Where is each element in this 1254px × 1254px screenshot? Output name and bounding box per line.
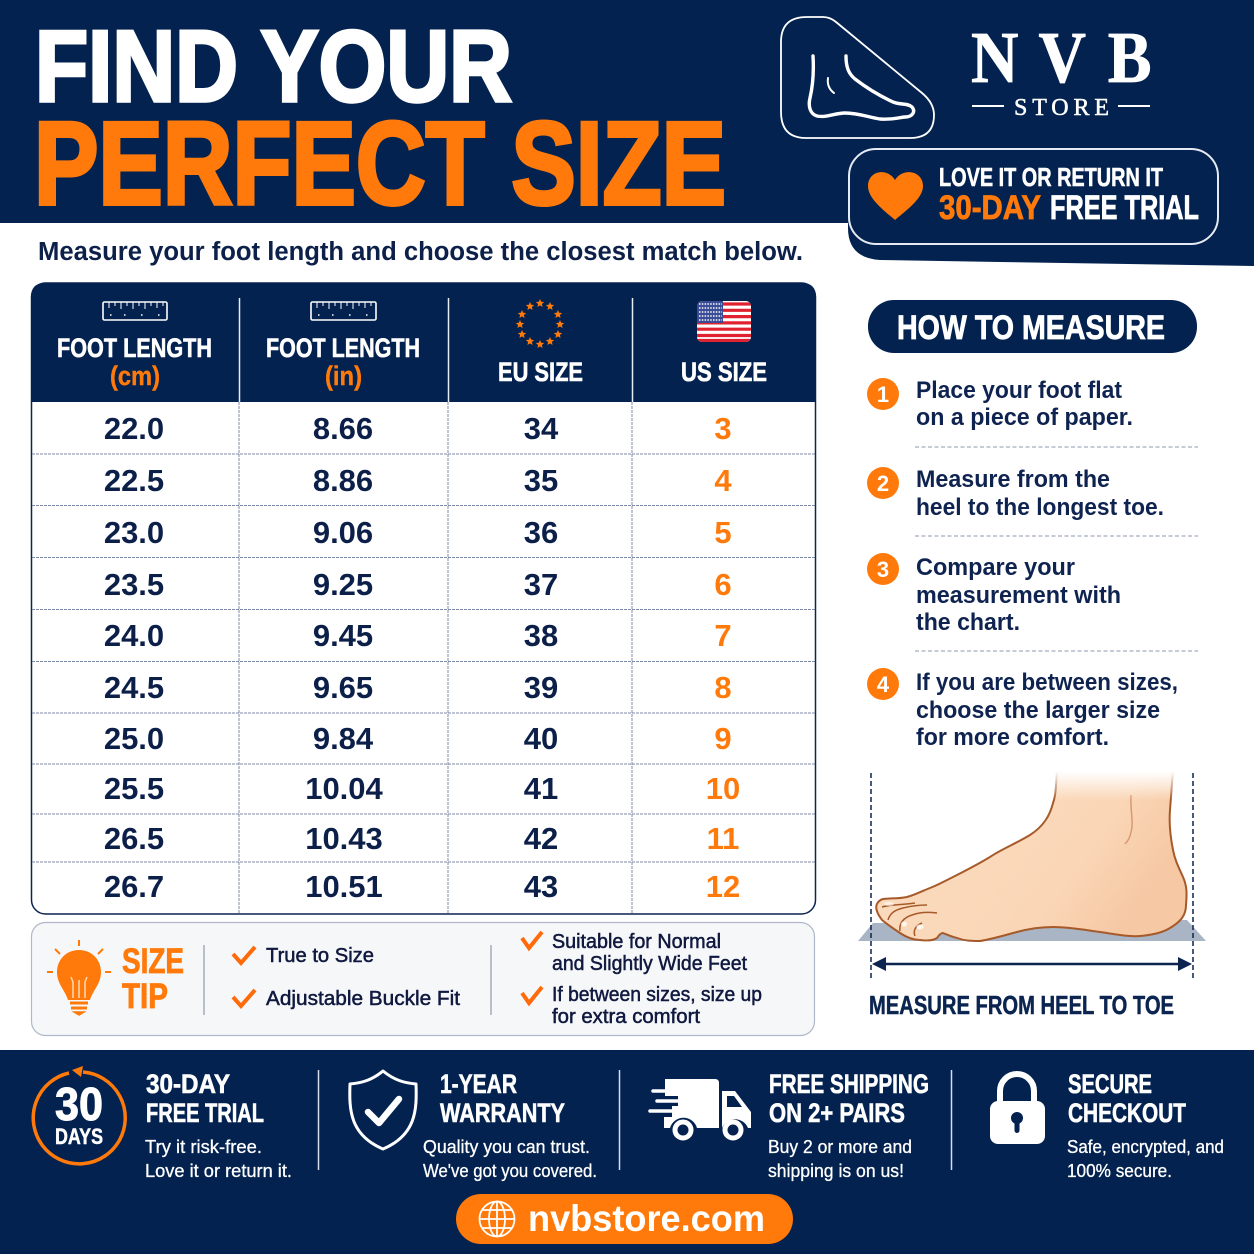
- table rows: 8.86: [313, 463, 373, 498]
- column headings: FOOT LENGTH: [57, 333, 212, 363]
- step 3: Compare your: [916, 554, 1075, 581]
- feature: free shipping: Buy 2 or more and: [768, 1136, 912, 1157]
- panel: how to measure: [867, 300, 1198, 751]
- header background: [0, 0, 1254, 266]
- brand logo: NVB: [971, 18, 1152, 99]
- feature: 30-day free trial: Try it risk-free.: [145, 1136, 262, 1157]
- table rows: 40: [524, 721, 558, 756]
- table rows: 25.0: [104, 721, 164, 756]
- feature: 1-year warranty: Quality you can trust.: [423, 1136, 590, 1157]
- icon: foot logo: [781, 17, 934, 138]
- table rows: 10.51: [305, 869, 383, 904]
- panel: size tip: SIZE: [122, 942, 184, 981]
- table rows: 9.84: [313, 721, 374, 756]
- website button: [456, 1194, 793, 1244]
- table rows: 10: [706, 771, 740, 806]
- icon: light bulb: [47, 940, 111, 1015]
- feature: free shipping: FREE SHIPPING: [769, 1069, 929, 1099]
- icon: US flag: [697, 301, 751, 342]
- table rows: 41: [524, 771, 558, 806]
- feature: 1-year warranty: [350, 1069, 597, 1181]
- step 1: 1: [877, 382, 889, 407]
- table rows: 26.7: [104, 869, 164, 904]
- badge: 30-day free trial: [849, 149, 1218, 244]
- icon: check marks: [233, 932, 542, 1006]
- step 1: [867, 377, 1133, 431]
- badge: 30-day free trial: 30-DAY: [939, 189, 1041, 227]
- step 2: 2: [877, 471, 889, 496]
- table rows: 34: [524, 411, 559, 446]
- table rows: 22.0: [104, 411, 164, 446]
- column headings: [57, 333, 767, 391]
- title: PERFECT SIZE: [34, 98, 726, 230]
- table rows: 11: [707, 821, 739, 856]
- panel: size tip: and Slightly Wide Feet: [552, 953, 747, 975]
- website button: nvbstore.com: [528, 1198, 765, 1239]
- step 3: the chart.: [916, 609, 1020, 636]
- step 2: Measure from the: [916, 466, 1110, 493]
- table rows: 22.5: [104, 463, 164, 498]
- title: FIND YOUR: [35, 11, 512, 123]
- table rows: 8.66: [313, 411, 373, 446]
- feature: 30-day free trial: FREE TRIAL: [146, 1098, 264, 1128]
- column headings: US SIZE: [681, 357, 767, 387]
- foot illustration: [858, 764, 1206, 1020]
- feature: free shipping: shipping is on us!: [768, 1160, 904, 1181]
- feature: free shipping: ON 2+ PAIRS: [769, 1098, 905, 1128]
- arrow: heel to toe: [872, 957, 1192, 971]
- column headings: (in): [325, 361, 362, 391]
- feature: secure checkout: 100% secure.: [1067, 1160, 1172, 1181]
- icon: EU stars: [516, 299, 564, 348]
- icon: 30 days circular arrow: 30: [55, 1078, 103, 1130]
- step 3: measurement with: [916, 582, 1121, 609]
- feature: secure checkout: CHECKOUT: [1068, 1098, 1186, 1128]
- feature: secure checkout: [990, 1069, 1224, 1181]
- badge: 30-day free trial: FREE TRIAL: [1050, 189, 1199, 227]
- feature: free shipping: [650, 1069, 929, 1181]
- column headings: (cm): [110, 361, 160, 391]
- table rows: 9.65: [313, 670, 373, 705]
- table rows: 35: [524, 463, 558, 498]
- panel: size tip: TIP: [122, 977, 168, 1016]
- step 4: 4: [877, 672, 890, 697]
- step 2: [867, 466, 1164, 521]
- panel: size tip: True to Size: [266, 945, 374, 967]
- icon: truck: [650, 1079, 751, 1138]
- brand logo: STORE: [1014, 95, 1109, 121]
- table rows: 24.5: [104, 670, 164, 705]
- icon: ruler in: [311, 302, 376, 320]
- table rows: 39: [524, 670, 558, 705]
- table rows: 43: [524, 869, 558, 904]
- step 3: 3: [877, 557, 889, 582]
- table rows: 5: [714, 515, 732, 550]
- feature: secure checkout: Safe, encrypted, and: [1067, 1136, 1224, 1157]
- table rows: 23.5: [104, 567, 164, 602]
- feature: 30-day free trial: Love it or return it.: [145, 1160, 292, 1181]
- table rows: 42: [524, 821, 558, 856]
- table rows: 10.04: [305, 771, 384, 806]
- feature: 1-year warranty: WARRANTY: [440, 1098, 565, 1128]
- footer band: [0, 1050, 1254, 1254]
- step 4: If you are between sizes,: [916, 669, 1178, 696]
- panel: how to measure: HOW TO MEASURE: [897, 309, 1165, 347]
- table rows: 25.5: [104, 771, 164, 806]
- table rows: 37: [524, 567, 558, 602]
- table rows: 38: [524, 618, 558, 653]
- table rows: 9.45: [313, 618, 373, 653]
- icon: 30 days circular arrow: DAYS: [55, 1124, 103, 1149]
- icon: ruler cm: [103, 302, 167, 320]
- table rows: 9.25: [313, 567, 373, 602]
- table rows: 12: [706, 869, 740, 904]
- step 1: on a piece of paper.: [916, 404, 1133, 431]
- step 4: choose the larger size: [916, 697, 1160, 724]
- panel: size tip: [32, 922, 814, 1036]
- table rows: 7: [714, 618, 732, 653]
- feature: secure checkout: SECURE: [1068, 1069, 1152, 1099]
- table rows: 24.0: [104, 618, 164, 653]
- icon: globe: [480, 1202, 514, 1236]
- table rows: 36: [524, 515, 558, 550]
- step 4: [867, 668, 1178, 751]
- table rows: 26.5: [104, 821, 164, 856]
- feature: 1-year warranty: 1-YEAR: [440, 1069, 517, 1099]
- step 4: for more comfort.: [916, 724, 1109, 751]
- table rows: 10.43: [305, 821, 383, 856]
- icon: 30 days circular arrow: [33, 1066, 125, 1164]
- column headings: EU SIZE: [498, 357, 583, 387]
- icon: padlock: [990, 1074, 1045, 1144]
- panel: size tip: Suitable for Normal: [552, 931, 721, 953]
- table rows: 23.0: [104, 515, 164, 550]
- feature: 30-day free trial: 30-DAY: [146, 1069, 230, 1099]
- foot illustration: MEASURE FROM HEEL TO TOE: [869, 990, 1174, 1020]
- subtitle: Measure your foot length and choose the closest match below.: [38, 238, 803, 266]
- icon: heart: [868, 172, 923, 220]
- table rows: 6: [714, 567, 732, 602]
- step 1: Place your foot flat: [916, 377, 1122, 404]
- column headings: FOOT LENGTH: [266, 333, 420, 363]
- badge: 30-day free trial: LOVE IT OR RETURN IT: [939, 162, 1163, 192]
- step 2: heel to the longest toe.: [916, 494, 1164, 521]
- table rows: [104, 411, 740, 904]
- title: [34, 11, 726, 230]
- panel: size tip: for extra comfort: [552, 1006, 700, 1028]
- feature: 30-day free trial: [33, 1066, 292, 1181]
- table rows: 9.06: [313, 515, 373, 550]
- size chart table: [31, 283, 816, 914]
- table rows: 4: [714, 463, 732, 498]
- panel: size tip: Adjustable Buckle Fit: [266, 988, 460, 1010]
- panel: size tip: If between sizes, size up: [552, 984, 762, 1006]
- icon: shield: [350, 1071, 416, 1149]
- feature: 1-year warranty: We've got you covered.: [423, 1160, 597, 1181]
- table rows: 8: [714, 670, 732, 705]
- table rows: 3: [714, 411, 732, 446]
- step 3: [867, 553, 1121, 636]
- table rows: 9: [714, 721, 732, 756]
